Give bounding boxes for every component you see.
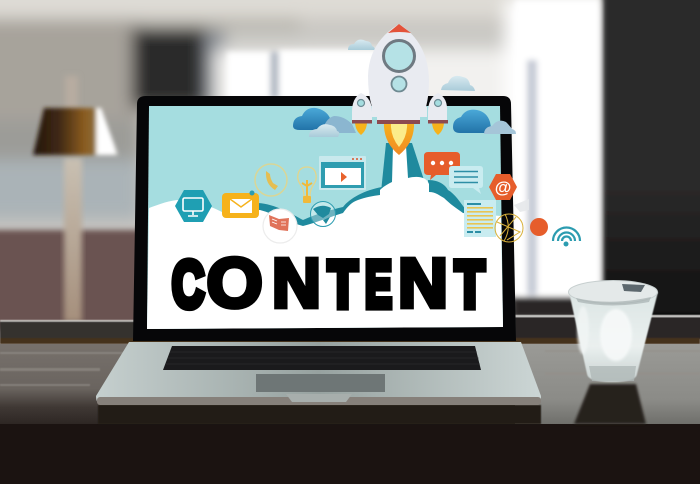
rocket nose cone (388, 24, 411, 33)
rocket large window (384, 40, 414, 72)
glass rim (568, 280, 658, 304)
headline: O (207, 245, 263, 323)
headline (171, 245, 487, 323)
glass highlights (600, 309, 632, 361)
icon: light chat bubble (449, 166, 483, 194)
glass reflection (574, 384, 646, 424)
headline: T (455, 248, 484, 322)
main flame (384, 122, 414, 155)
icon: wifi signal (553, 228, 580, 246)
icon: orange dot (530, 218, 548, 236)
side flames (355, 122, 367, 135)
icon: video window (319, 156, 366, 190)
lamp shade (33, 108, 118, 155)
cloud: blue left (293, 108, 338, 130)
laptop lid bezel (133, 96, 516, 341)
right booster (428, 93, 447, 123)
headline: N (398, 245, 448, 323)
cloud: white left (309, 124, 339, 137)
laptop base (96, 342, 541, 405)
glass body (569, 292, 658, 382)
icon: document (464, 200, 496, 237)
cloud: top right (441, 76, 475, 91)
laptop screen (147, 106, 503, 329)
icon: globe (310, 202, 336, 226)
clouds around rocket (293, 40, 516, 137)
laptop shadow on table (98, 405, 541, 424)
icon: phone circle (255, 164, 287, 196)
cloud: pale blue left (322, 116, 356, 133)
icon: at-sign hexagon: @ (495, 178, 511, 197)
headline: E (364, 248, 391, 322)
rocket trails (381, 143, 424, 192)
icon: orange chat bubble (424, 152, 460, 180)
icon: at-sign hexagon (489, 174, 517, 200)
keyboard (163, 346, 481, 370)
icon: paper plane (514, 199, 529, 212)
rocket (352, 24, 448, 155)
water glass (568, 280, 658, 424)
white cloud and lower screen (147, 146, 503, 329)
headline: C (172, 248, 205, 322)
headline: N (272, 245, 321, 323)
window sill (0, 315, 700, 344)
icon: network globe (495, 214, 523, 242)
floor lamp (33, 76, 118, 322)
trackpad (256, 374, 385, 392)
lamp pole (64, 76, 82, 322)
headline: T (328, 248, 357, 322)
icon: open book circle (263, 209, 297, 243)
cloud: small top left (348, 40, 375, 50)
rocket body (368, 24, 429, 124)
left booster (352, 93, 372, 123)
cloud: blue right (453, 110, 492, 133)
rocket small window (392, 76, 406, 92)
teal wave behind cloud (258, 180, 466, 232)
icon: monitor hexagon (175, 190, 212, 222)
icon: light bulb (298, 167, 316, 203)
sky panel (147, 106, 503, 329)
cloud: pale right (484, 121, 516, 134)
icon: mail envelope (222, 190, 259, 218)
wooden table (0, 344, 700, 484)
